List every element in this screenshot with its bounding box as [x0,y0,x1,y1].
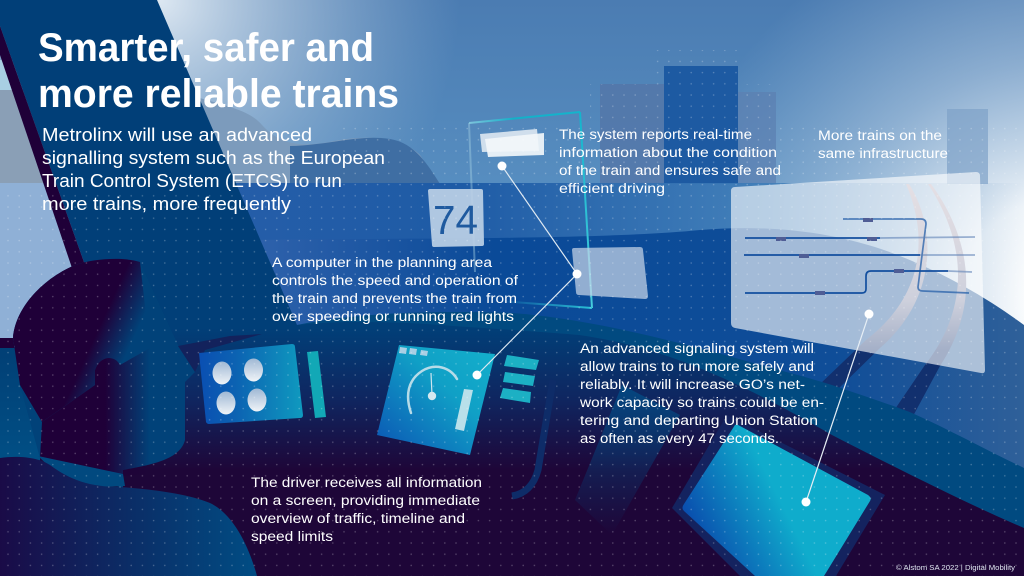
planning area computer card [572,247,648,299]
screen level bar [455,389,473,431]
intro text: Train Control System (ETCS) to run [42,171,342,191]
left seat edge [0,338,40,462]
hills [0,90,440,184]
driver collar [38,456,125,488]
bottom right display [682,425,871,576]
head-up display frame [469,112,592,308]
callout: advanced signaling: allow trains to run more safely and [580,359,814,375]
callout: advanced signaling: as often as every 47 seconds. [580,431,779,447]
speed limit sign 74: 74 [433,197,478,243]
callout: planning area computer: over speeding or running red lights [272,309,514,325]
copyright: © Alstom SA 2022 | Digital Mobility [896,563,1015,572]
callout: real-time reporting: of the train and ensures safe and [559,163,781,179]
track lines [744,219,975,293]
title: more reliable trains [38,72,399,116]
train status card [480,129,544,157]
callout: advanced signaling: reliably. It will increase GO’s net- [580,377,805,393]
callout: real-time reporting: information about the condition [559,145,777,161]
dashboard body [40,322,1024,576]
dashboard console shadows [512,380,885,576]
dashboard upper band [297,312,1024,540]
callout: more trains: same infrastructure [818,146,948,162]
callout: more trains: More trains on the [818,128,942,144]
callout: more trains [818,128,948,162]
callout: real-time reporting [559,127,781,197]
trains on tracks [776,218,904,295]
driver screen with speedometer [377,345,495,455]
callout: driver screen: overview of traffic, timeline and [251,511,465,527]
callout: advanced signaling: An advanced signaling system will [580,341,814,357]
intro text: more trains, more frequently [42,194,292,214]
callout: real-time reporting: The system reports real-time [559,127,752,143]
callout: planning area computer: controls the speed and operation of [272,273,518,289]
driver hair shading [13,259,150,422]
callout: planning area computer [272,255,518,325]
callout: planning area computer: A computer in the planning area [272,255,492,271]
city buildings on horizon [600,66,988,184]
driver neck shading [40,348,150,484]
callout: driver screen: speed limits [251,529,333,545]
speed limit sign 74 [428,189,484,247]
intro text [42,125,385,214]
panel teal bar [307,351,326,418]
left side window [0,60,100,353]
side status bars [500,355,539,403]
title [38,26,399,116]
lower landscape band [0,183,1024,353]
driver shoulder [0,457,257,576]
callout: advanced signaling: tering and departing Union Station [580,413,818,429]
foreground blue wave [250,228,1024,576]
callout: driver screen: The driver receives all information [251,475,482,491]
callout: planning area computer: the train and prevents the train from [272,291,517,307]
intro text: Metrolinx will use an advanced [42,125,312,145]
driver head [13,259,195,488]
speedometer gauge [408,367,457,413]
callout: driver screen [251,475,482,545]
callout: advanced signaling [579,341,824,447]
cab windscreen pillar [0,0,297,420]
rail track curves [819,184,966,418]
driver silhouette [0,259,262,576]
intro text: signalling system such as the European [42,148,385,168]
driver cap brim [178,334,262,372]
windscreen divider strip [0,26,85,268]
callout: real-time reporting: efficient driving [559,181,665,197]
callout leader lines [472,162,874,506]
callout: driver screen: on a screen, providing immediate [251,493,480,509]
track map screen [731,172,985,373]
left control panel [199,344,326,424]
title: Smarter, safer and [38,26,374,70]
panel buttons [212,358,266,414]
screen tabs [399,347,428,356]
callout: advanced signaling: work capacity so trains could be en- [579,395,824,411]
